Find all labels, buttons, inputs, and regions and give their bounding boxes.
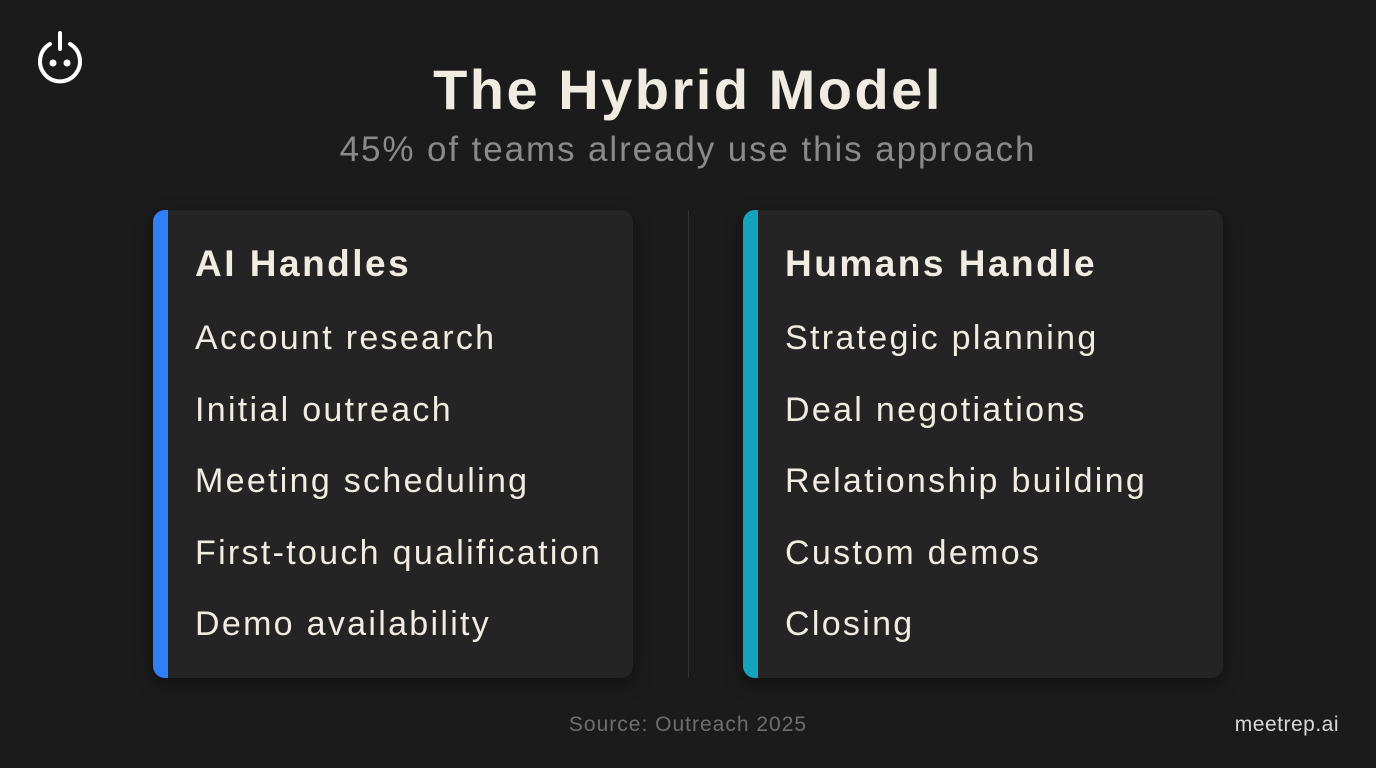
panel: AI handles: Initial outreach — [195, 391, 453, 429]
panel: Humans handle: Relationship building — [785, 462, 1147, 500]
icon: logo — [38, 31, 82, 84]
panel: AI handles — [153, 210, 633, 678]
list: human items — [785, 319, 1147, 643]
panel: AI handles: First-touch qualification — [195, 534, 602, 572]
panel: Humans handle: Custom demos — [785, 534, 1041, 572]
heading: Humans Handle: Humans Handle — [785, 243, 1097, 284]
panel: Humans handle: Strategic planning — [785, 319, 1099, 357]
list: AI items — [195, 319, 602, 643]
panel: AI handles: Account research — [195, 319, 496, 357]
panel: Humans handle: Closing — [785, 605, 914, 643]
panel: Humans handle — [743, 210, 1223, 678]
title: The Hybrid Model — [433, 58, 943, 121]
panel: Humans handle: Deal negotiations — [785, 391, 1087, 429]
brand: meetrep.ai — [1235, 713, 1339, 736]
panel: AI handles: Meeting scheduling — [195, 462, 529, 500]
source: Source: Outreach 2025 — [569, 713, 807, 736]
panel: AI handles: Demo availability — [195, 605, 491, 643]
heading: AI Handles: AI Handles — [195, 243, 411, 284]
subtitle: 45% of teams already use this approach — [340, 130, 1036, 169]
